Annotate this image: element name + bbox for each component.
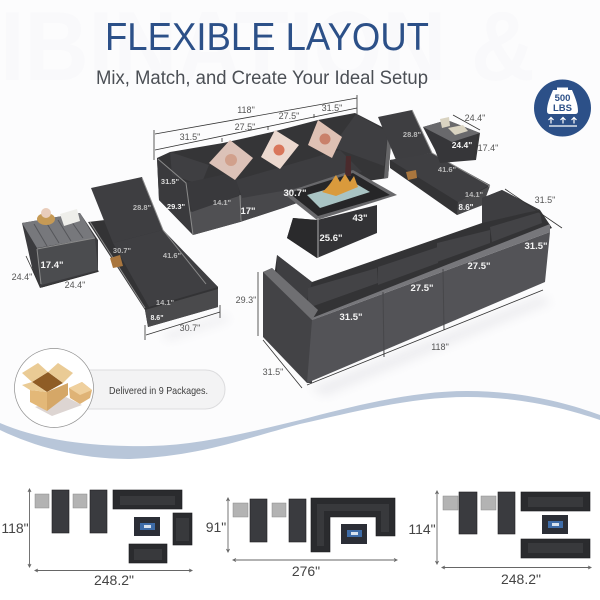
large front sofa: 29.3" <box>236 295 256 305</box>
back sofa: 14.1" <box>213 198 232 207</box>
badge: 500 lbs weight capacity: LBS <box>553 103 572 114</box>
left side table <box>12 208 99 290</box>
top dimension lines: 118" <box>237 105 255 115</box>
right side table: 24.4" <box>465 113 485 123</box>
pillow 1 <box>209 140 253 180</box>
right chaise lounger: 28.8" <box>403 130 422 139</box>
side tables <box>233 503 286 517</box>
icon: bottles <box>345 156 351 176</box>
layout option 3: 114" <box>408 521 436 537</box>
sofas <box>521 492 590 558</box>
icon: decor on table <box>37 208 80 226</box>
upper background panel <box>0 0 600 446</box>
fire pit <box>341 524 367 544</box>
fire pit table <box>283 156 397 258</box>
loungers <box>459 492 515 534</box>
right chaise lounger <box>378 110 490 215</box>
pillow 2 <box>261 130 299 169</box>
left chaise lounger: 28.8" <box>133 203 152 212</box>
icon: decor on table <box>440 117 468 135</box>
left chaise lounger: 14.1" <box>156 298 175 307</box>
icon: lounger wheel <box>406 170 417 180</box>
left side table: 17.4" <box>40 260 64 271</box>
side tables <box>443 496 496 510</box>
large front sofa: 31.5" <box>263 367 283 377</box>
fire pit table: 30.7" <box>284 188 306 199</box>
side tables <box>35 494 87 508</box>
back sofa <box>157 113 392 235</box>
icon: flames <box>322 174 358 196</box>
right side table: 17.4" <box>478 143 498 153</box>
callout text: Delivered in 9 Packages. <box>109 385 208 397</box>
top dimension lines: 31.5" <box>180 132 200 142</box>
floor shadows <box>160 296 552 396</box>
wave band <box>0 391 600 459</box>
large front sofa: 27.5" <box>468 261 490 272</box>
sofas <box>113 490 192 563</box>
fire pit <box>134 517 160 536</box>
fire pit table: 43" <box>352 213 368 224</box>
layout option 3 <box>408 491 591 587</box>
layout option 1 <box>1 489 192 588</box>
left chaise lounger: 41.6" <box>163 251 182 260</box>
layout option 1: 118" <box>1 520 29 536</box>
dimension arrows <box>436 491 591 569</box>
left chaise lounger <box>88 177 220 340</box>
left chaise lounger: 30.7" <box>113 246 132 255</box>
right chaise lounger: 41.6" <box>438 165 457 174</box>
top dimension lines: 31.5" <box>322 103 342 113</box>
right chaise lounger: 8.6" <box>459 203 474 212</box>
badge: 500 lbs weight capacity: 500 <box>555 93 570 104</box>
right side table <box>423 113 498 163</box>
fire pit <box>542 515 568 534</box>
title: FLEXIBLE LAYOUT <box>105 16 429 59</box>
U sectional <box>311 498 395 552</box>
large front sofa: 118" <box>431 342 449 352</box>
badge: 500 lbs weight capacity <box>534 80 591 136</box>
right side table: 24.4" <box>452 140 472 150</box>
large front sofa: 31.5" <box>524 241 548 252</box>
callout icon circle <box>14 348 94 428</box>
left side table: 24.4" <box>65 280 85 290</box>
subtitle: Mix, Match, and Create Your Ideal Setup <box>96 68 428 89</box>
fire pit table: 25.6" <box>320 233 342 244</box>
right chaise lounger: 14.1" <box>465 190 484 199</box>
large front sofa <box>236 189 562 388</box>
icon: lounger wheel <box>110 255 123 268</box>
layout option 2: 276" <box>292 563 320 579</box>
top dimension lines <box>154 95 357 160</box>
back sofa: 31.5" <box>161 177 180 186</box>
top dimension lines: 27.5" <box>235 122 255 132</box>
layout option 1: 248.2" <box>94 572 134 588</box>
left chaise lounger: 8.6" <box>150 315 164 322</box>
back sofa: 29.3" <box>167 202 186 211</box>
large front sofa: 27.5" <box>410 283 434 294</box>
large front sofa: 31.5" <box>535 195 555 205</box>
left chaise lounger: 30.7" <box>180 323 200 333</box>
dimension arrows <box>28 489 192 572</box>
layout option 2 <box>206 498 397 579</box>
dimension arrows <box>226 498 397 562</box>
left side table: 24.4" <box>12 272 32 282</box>
large front sofa: 31.5" <box>340 312 362 323</box>
pillow 3 <box>308 120 342 158</box>
loungers <box>52 490 107 533</box>
back sofa: 17" <box>240 206 256 217</box>
layout option 2: 91" <box>206 519 226 535</box>
callout pill <box>60 370 225 409</box>
delivery callout <box>14 348 225 428</box>
icon: cardboard boxes <box>22 363 92 416</box>
layout option 3: 248.2" <box>501 571 541 587</box>
top dimension lines: 27.5" <box>279 111 299 121</box>
loungers <box>250 499 306 542</box>
